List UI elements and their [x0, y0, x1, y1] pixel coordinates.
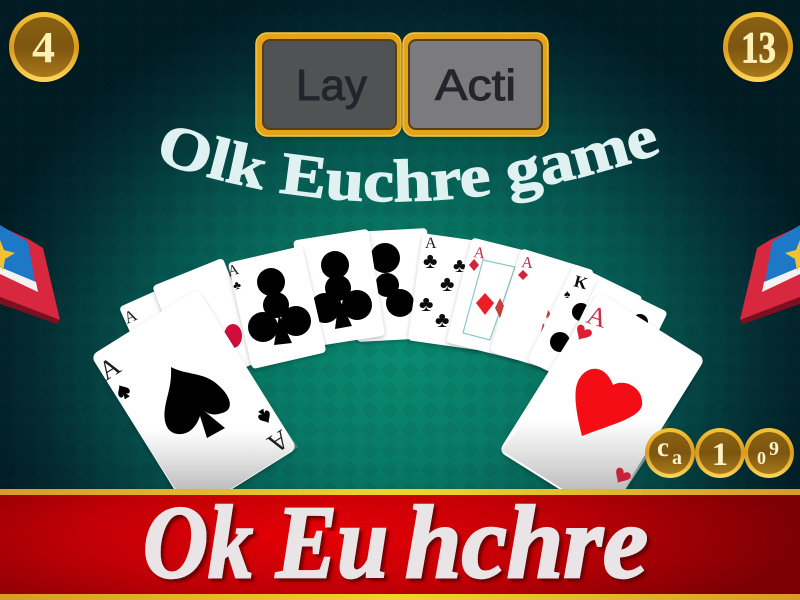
card: hidden fifth fan card with club: [351, 228, 433, 342]
coin: small 09: [744, 428, 794, 478]
flag: left ribbon: [0, 225, 60, 324]
button: Acti: Acti: [435, 61, 516, 110]
banner: red title strip: [0, 485, 800, 600]
card: sixth fan card, ace of clubs: [408, 233, 498, 351]
card: large ace of spades: [91, 289, 298, 515]
card: seventh fan card, diamonds with teal frame: A: [472, 244, 487, 263]
card: fourth fan card with club: [293, 229, 385, 347]
button: Lay: [256, 33, 401, 136]
coin: small Ca: [645, 428, 695, 478]
card: sixth fan card, ace of clubs: A: [425, 235, 437, 252]
coin: right score 13: [723, 12, 793, 82]
banner: red title strip: Ok: [143, 485, 253, 600]
card: third fan card with club: [226, 246, 326, 369]
card: sixth fan card, ace of clubs: ♣: [440, 271, 454, 296]
coin: right score 13: 13: [741, 23, 776, 72]
card: third fan card with club: ♣: [232, 277, 242, 293]
button: Lay: Lay: [296, 61, 367, 110]
card: large ace of spades: A: [93, 350, 126, 386]
banner: red title strip: Eu: [275, 485, 388, 600]
card: eighth fan card, ace with red pips: [490, 248, 594, 374]
card: sixth fan card, ace of clubs: ♣: [453, 255, 466, 277]
card: sixth fan card, ace of clubs: ♣: [419, 291, 433, 316]
coin: small Ca: a: [672, 447, 682, 469]
coin: small Ca: c: [657, 432, 669, 462]
coin: small 09: 9: [769, 438, 779, 460]
banner: red title strip: hchre: [405, 485, 648, 600]
card: third fan card with club: A: [226, 262, 241, 280]
card: sixth fan card, ace of clubs: ♣: [423, 248, 437, 273]
coin: left score 4: [9, 12, 79, 82]
card: large ace of spades: A: [262, 424, 295, 460]
card: ninth fan card, king: [527, 264, 643, 394]
button: Acti: [403, 33, 548, 136]
card: first fan card: [119, 276, 233, 408]
curved title: Olk Euchre game: [161, 128, 660, 204]
card: ninth fan card, king: ♠: [564, 287, 571, 301]
card: large ace of hearts: A: [583, 299, 611, 334]
card: ninth fan card, king: K: [572, 272, 590, 293]
card: seventh fan card, diamonds with teal frame: [446, 237, 546, 361]
flag: right ribbon: [740, 225, 800, 324]
coin: small 1: 1: [712, 437, 728, 473]
card: large ace of hearts: [499, 292, 705, 518]
coin: left score 4: 4: [32, 23, 55, 72]
card: sixth fan card, ace of clubs: ♣: [435, 307, 449, 332]
coin: small 09: 0: [757, 448, 766, 468]
card: eighth fan card, ace with red pips: A: [521, 254, 534, 272]
card: tenth fan card: [552, 279, 668, 409]
card: second fan card with red pip: [152, 258, 264, 388]
card: first fan card: A: [121, 305, 141, 328]
coin: small 1: [695, 428, 745, 478]
